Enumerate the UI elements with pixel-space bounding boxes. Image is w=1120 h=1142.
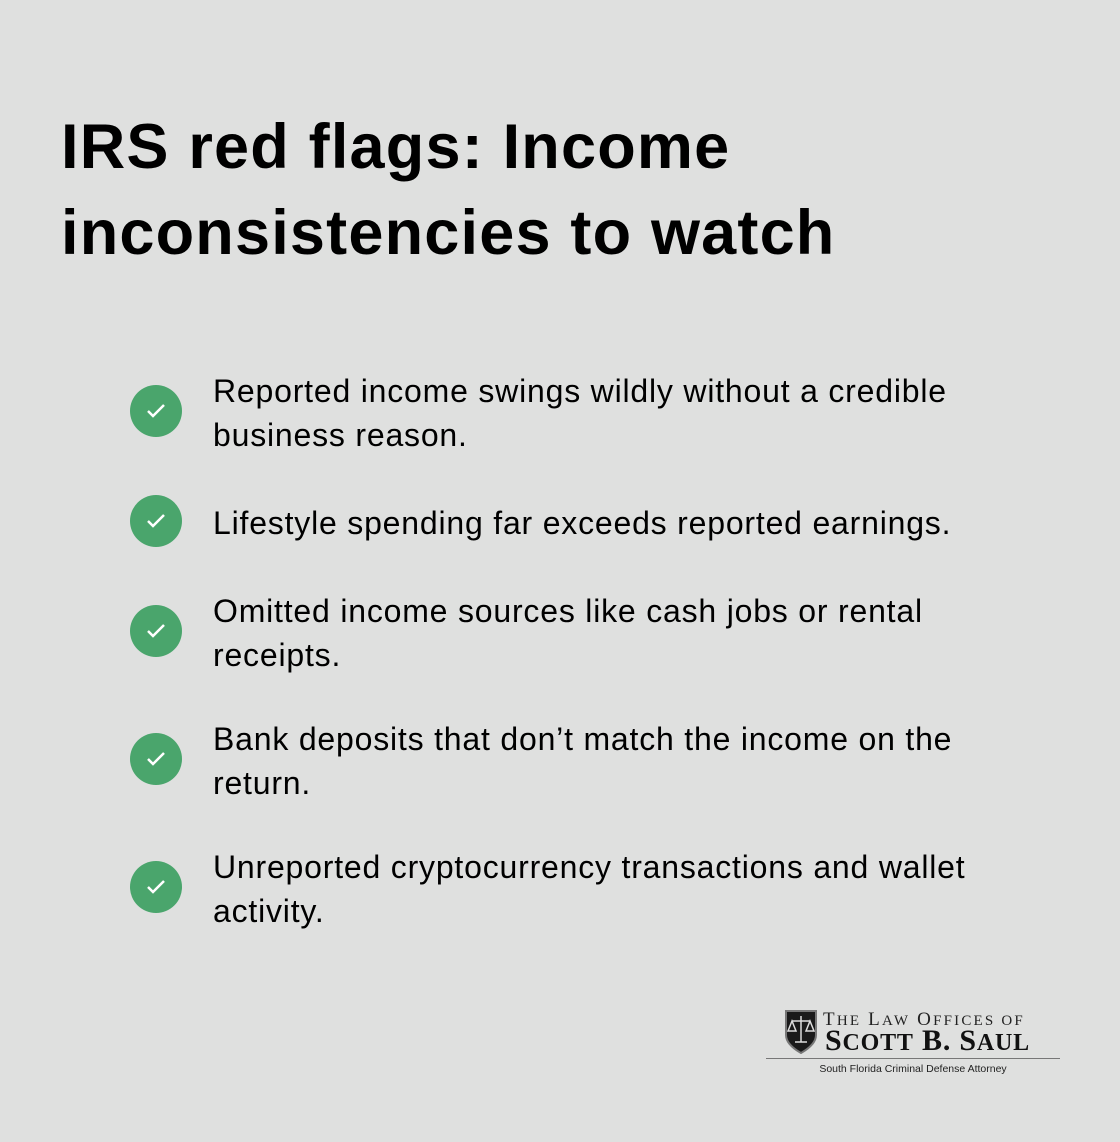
icon: check: [130, 605, 182, 657]
icon: check: [130, 733, 182, 785]
logo: SCOTT B. SAUL: [825, 1024, 1030, 1057]
text: business reason.: [213, 417, 468, 453]
icon: shield with scales: [785, 1010, 817, 1054]
text: [213, 373, 947, 453]
logo: South Florida Criminal Defense Attorney: [819, 1063, 1007, 1075]
item 5: [130, 849, 965, 929]
item 3: [130, 593, 923, 673]
text: activity.: [213, 893, 325, 929]
text: Reported income swings wildly without a credible: [213, 373, 947, 409]
text: [213, 849, 965, 929]
text: return.: [213, 765, 311, 801]
text: receipts.: [213, 637, 341, 673]
icon: check: [130, 861, 182, 913]
text: Omitted income sources like cash jobs or rental: [213, 593, 923, 629]
text: [213, 721, 952, 801]
icon: check: [130, 385, 182, 437]
item 4: [130, 721, 952, 801]
text: [213, 593, 923, 673]
item 1: [130, 373, 947, 453]
icon: check: [130, 495, 182, 547]
title: [61, 112, 836, 268]
text: Unreported cryptocurrency transactions and wallet: [213, 849, 965, 885]
logo: [766, 1009, 1060, 1075]
text: Bank deposits that don’t match the income on the: [213, 721, 952, 757]
title: IRS red flags: Income: [61, 112, 730, 182]
item 2: [130, 495, 951, 547]
text: Lifestyle spending far exceeds reported earnings.: [213, 505, 951, 541]
logo text: THE LAW OFFICES OF: [823, 1009, 1025, 1030]
title: inconsistencies to watch: [61, 198, 836, 268]
